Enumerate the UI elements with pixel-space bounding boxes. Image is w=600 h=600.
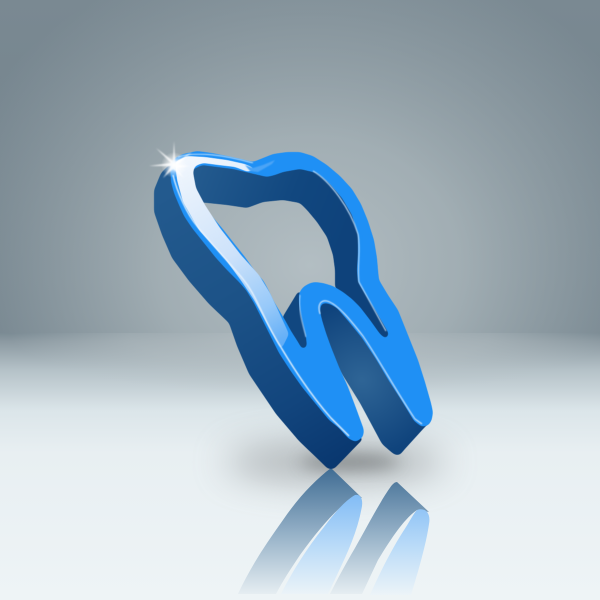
gloss fade across top of crown (245, 160, 275, 172)
arch highlight (300, 295, 306, 337)
inner back wall of crown (186, 161, 389, 342)
tooth reflection (238, 468, 429, 595)
inner side of right root (317, 299, 432, 455)
white edge highlight right (313, 171, 386, 331)
notch inner wall (282, 290, 310, 351)
top thin highlight (178, 154, 253, 163)
background: wall (0, 0, 600, 335)
tooth 3D body (154, 161, 432, 469)
outer left side wall (154, 163, 364, 469)
background: reflective floor (0, 333, 600, 600)
sparkle (149, 141, 192, 178)
floor shadow under tooth (225, 442, 445, 482)
white edge highlight left (173, 175, 349, 436)
tooth front face (170, 151, 433, 442)
gloss band on left edge (175, 156, 289, 350)
white edge highlight root (319, 301, 422, 424)
